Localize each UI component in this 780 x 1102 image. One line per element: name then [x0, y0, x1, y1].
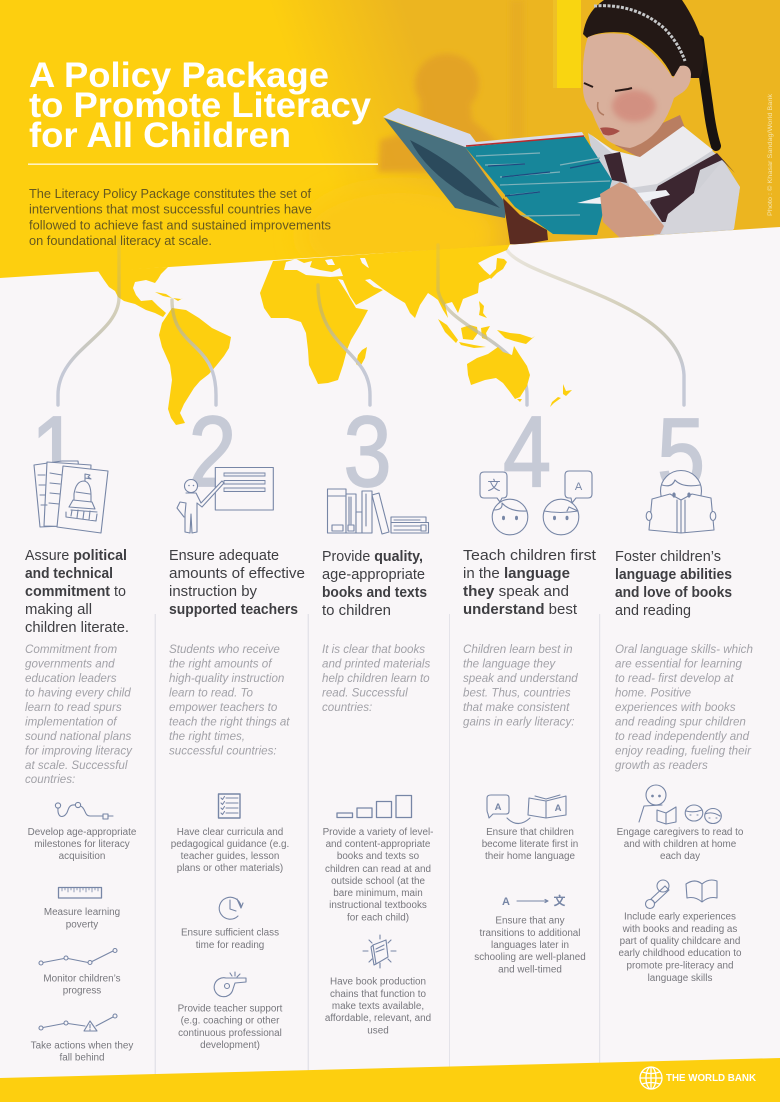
book right page — [465, 136, 612, 235]
column 4 heading: understand best — [463, 601, 578, 618]
column 3 heading — [322, 548, 427, 619]
pen — [577, 190, 670, 205]
intro text — [29, 187, 331, 248]
icon: two children with speech bubbles — [480, 471, 592, 535]
step: curricula text: pedagogical guidance (e.g. — [171, 839, 289, 850]
column 4 description: best. Thus, countries — [463, 686, 571, 700]
column 4 description: speak and understand — [463, 672, 578, 685]
column 5 description: to read- first develop at — [615, 672, 734, 685]
column 5 heading: and reading — [615, 602, 691, 619]
step: action text — [31, 1040, 133, 1064]
column 2 description: the right times, — [169, 730, 245, 743]
step: milestones text: Develop age-appropriate — [28, 827, 137, 838]
column 2 description: high-quality instruction — [169, 672, 284, 685]
column 1 description: implementation of — [25, 716, 118, 728]
column 2 description: successful countries: — [169, 744, 277, 758]
column 5 description — [615, 643, 753, 772]
Caribbean islands — [155, 292, 183, 301]
step: variety text: children can read at and — [325, 864, 431, 875]
step: milestones text: milestones for literacy — [34, 839, 130, 850]
face — [583, 33, 691, 148]
icon: book with rays — [363, 935, 396, 968]
column 1 description: Commitment from — [25, 643, 117, 656]
column 4 description: gains in early literacy: — [463, 716, 574, 728]
connector lines from map to steps — [58, 240, 684, 405]
column 2 heading: Ensure adequate — [169, 547, 279, 564]
step: measure text: poverty — [66, 920, 98, 930]
column 5 description: enjoy reading, fueling their — [615, 744, 752, 758]
column 2 heading: amounts of effective — [169, 565, 305, 582]
step: early experiences text: with books and reading as — [622, 924, 737, 935]
step: early experiences text: early childhood education to — [619, 948, 742, 959]
step numbers — [31, 396, 705, 509]
South America — [159, 308, 231, 425]
intro text: The Literacy Policy Package constitutes the set of — [29, 187, 312, 201]
column 1 description: learn to read spurs — [25, 701, 122, 714]
column 4 heading — [463, 547, 597, 618]
column 2 description: the right amounts of — [169, 658, 273, 670]
step: measure text — [44, 907, 120, 930]
title: for All Children — [29, 116, 291, 155]
column 5 description: experiences with books — [615, 701, 736, 714]
icon: whistle — [214, 972, 246, 997]
step: home language text — [482, 827, 578, 862]
Japan — [489, 258, 507, 279]
column 4 heading: in the language — [463, 565, 570, 582]
column 1 description: to having every child — [25, 686, 131, 700]
column 5 heading: and love of books — [615, 584, 732, 601]
World Bank logo — [640, 1067, 757, 1089]
icon: child reading — [646, 470, 716, 533]
column 1 description — [25, 643, 133, 786]
step: early experiences text — [619, 912, 742, 984]
step: milestones text — [28, 827, 137, 862]
title rule — [28, 163, 378, 165]
step: home language text: their home language — [485, 851, 576, 862]
step: teacher support text: continuous professional — [178, 1028, 282, 1039]
step: variety text: bare minimum, main — [333, 888, 423, 899]
blouse — [588, 125, 740, 240]
column 1 heading: and technical — [25, 565, 113, 582]
headband — [594, 6, 685, 61]
eyes, nose and mouth — [584, 83, 632, 91]
column 2 heading: instruction by — [169, 583, 257, 600]
icon: teacher at board — [177, 468, 273, 533]
column 5 description: home. Positive — [615, 686, 692, 700]
step: transitions text: Ensure that any — [495, 916, 565, 926]
step: production text: make texts available, — [332, 1001, 424, 1012]
column 1 heading: making all — [25, 601, 92, 618]
column 2 description: learn to read. To — [169, 686, 254, 700]
step numbers: 1 — [31, 396, 79, 507]
step numbers: 4 — [503, 396, 551, 507]
world map — [98, 244, 572, 425]
column 2 description: Students who receive — [169, 643, 280, 656]
column 5 description: to read independently and — [615, 730, 750, 743]
column 3 description: It is clear that books — [322, 643, 425, 656]
column 1 heading — [25, 547, 129, 636]
column 5 heading — [615, 548, 732, 619]
column 1 heading: Assure political — [25, 547, 127, 564]
title: A Policy Package — [29, 56, 329, 95]
icon: ruler — [58, 888, 102, 898]
step: production text: used — [367, 1026, 389, 1036]
Mediterranean and inland seas — [284, 258, 369, 277]
column 2 heading — [169, 547, 305, 618]
step: curricula text: teacher guides, lesson — [181, 851, 279, 862]
column 1 description: education leaders — [25, 672, 117, 685]
map: Australia — [467, 346, 531, 403]
girl reading a book — [383, 0, 740, 245]
intro text: followed to achieve fast and sustained improvements — [29, 218, 331, 232]
cheek blush — [612, 90, 656, 122]
step: monitor text: progress — [63, 986, 101, 996]
Madagascar — [356, 347, 367, 367]
column 1 description: governments and — [25, 658, 115, 670]
Borneo and Sulawesi — [461, 325, 490, 340]
New Guinea — [497, 330, 535, 344]
column 5 heading: Foster children’s — [615, 548, 721, 565]
step: variety text: instructional textbooks — [329, 900, 427, 911]
step: milestones text: acquisition — [59, 851, 105, 862]
step: early experiences text: language skills — [648, 973, 712, 984]
column 5 description: and reading spur children — [615, 716, 746, 728]
column 4 heading: Teach children first — [463, 547, 597, 564]
column 5 heading: language abilities — [615, 566, 732, 583]
column 4 heading: they speak and — [463, 583, 569, 600]
step: variety text — [323, 827, 433, 924]
column 3 description: and printed materials — [322, 658, 430, 670]
step: variety text: books and texts so — [337, 851, 420, 862]
column 1 description: sound national plans — [25, 730, 132, 743]
step: transitions text: schooling are well-planed — [474, 952, 586, 963]
Africa, Eurasia — [260, 244, 510, 384]
book pages — [383, 108, 585, 147]
step: curricula text: Have clear curricula and — [177, 827, 283, 838]
hero photo panel — [0, 0, 780, 285]
icon: books — [328, 489, 428, 534]
icon: language transition arrow — [502, 893, 566, 908]
title: to Promote Literacy — [29, 86, 372, 125]
photo background: warm lower fade — [300, 192, 500, 258]
right hand — [600, 182, 664, 238]
step: early experiences text: Include early experiences — [624, 912, 736, 922]
step: transitions text: and well-timed — [498, 964, 562, 976]
step: transitions text: languages later in — [491, 940, 569, 951]
Philippines — [479, 301, 487, 318]
column 4 description — [463, 643, 578, 728]
step: production text: affordable, relevant, and — [325, 1013, 431, 1024]
step: transitions text — [474, 916, 586, 976]
step: production text — [325, 976, 431, 1036]
step: action text: Take actions when they — [31, 1040, 133, 1052]
column 2 description: teach the right things at — [169, 716, 290, 728]
step: curricula text — [171, 827, 289, 874]
photo background: shadow of a student — [378, 54, 510, 172]
icon: caregiver reading to children — [639, 785, 721, 824]
icon: speech bubble to book — [487, 795, 566, 824]
step: action text: fall behind — [59, 1052, 105, 1064]
icon: progress line — [39, 948, 117, 965]
column 2 description — [169, 643, 290, 758]
column 2 heading: supported teachers — [169, 601, 298, 618]
step: early experiences text: promote pre-literacy and — [626, 960, 734, 972]
step: caregivers text — [617, 827, 744, 862]
Tasmania — [517, 399, 522, 402]
step: variety text: Provide a variety of level- — [323, 827, 433, 838]
column 3 description: read. Successful — [322, 686, 408, 700]
intro text: interventions that most successful countries have — [29, 202, 312, 216]
photo background: window — [557, 0, 581, 88]
step: home language text: Ensure that children — [486, 827, 574, 838]
icon: two children with speech bubbles: 文 — [487, 478, 501, 493]
step: class time text: time for reading — [196, 940, 264, 951]
photo credit: Photo : © Khasar Sandag/World Bank — [766, 93, 774, 216]
step: measure text: Measure learning — [44, 907, 120, 918]
step: teacher support text: development) — [200, 1040, 260, 1051]
column 1 heading: commitment to — [25, 583, 126, 600]
column 3 description — [322, 643, 430, 714]
icon: progress line with warning — [39, 1014, 117, 1031]
title — [29, 56, 372, 155]
step: variety text: for each child) — [347, 912, 409, 924]
step: teacher support text: (e.g. coaching or other — [181, 1016, 280, 1026]
step: transitions text: transitions to additional — [479, 928, 581, 939]
step: production text: Have book production — [330, 976, 426, 988]
step: teacher support text — [178, 1004, 283, 1051]
icon: pacifier and open book — [646, 880, 717, 908]
column 2 description: empower teachers to — [169, 701, 278, 714]
plaid straps — [604, 152, 735, 222]
sleeve — [666, 182, 740, 229]
icon: increasing book sizes — [337, 796, 412, 818]
intro text: on foundational literacy at scale. — [29, 234, 212, 248]
icon: policy documents — [34, 461, 108, 533]
neck — [615, 115, 685, 158]
icon: language transition arrow: A — [502, 896, 510, 908]
step numbers: 3 — [344, 396, 391, 507]
footer band — [0, 1058, 780, 1102]
step: variety text: and content-appropriate — [326, 839, 431, 850]
step: curricula text: plans or other materials) — [177, 863, 283, 874]
World Bank logo: THE WORLD BANK — [666, 1073, 757, 1084]
icon: speech bubble to book: A — [495, 802, 502, 813]
step: caregivers text: and with children at home — [624, 839, 737, 850]
collar — [590, 126, 713, 188]
icon: speech bubble to book: A — [555, 803, 562, 814]
column 5 description: are essential for learning — [615, 658, 743, 670]
North America — [98, 267, 168, 317]
column 3 heading: to children — [322, 602, 391, 619]
column 3 heading: Provide quality, — [322, 548, 423, 565]
column 4 description: Children learn best in — [463, 643, 573, 656]
hair — [583, 0, 704, 78]
icon: two children with speech bubbles: A — [575, 481, 583, 493]
step: caregivers text: each day — [660, 851, 700, 862]
step numbers: 5 — [657, 398, 705, 509]
New Zealand — [550, 384, 572, 407]
column dividers — [155, 614, 600, 1078]
icon: clock — [219, 897, 243, 919]
step: monitor text: Monitor children’s — [43, 974, 121, 984]
column 3 heading: books and texts — [322, 584, 427, 601]
step: class time text — [181, 928, 279, 951]
column 1 heading: children literate. — [25, 619, 129, 636]
step: home language text: become literate first in — [482, 839, 578, 850]
braid — [699, 40, 716, 146]
step: variety text: outside school (at the — [331, 876, 425, 887]
icon: milestones path — [55, 802, 113, 819]
column 3 description: countries: — [322, 701, 372, 714]
column 4 description: that make consistent — [463, 701, 570, 714]
book left cover — [384, 118, 506, 218]
step: teacher support text: Provide teacher support — [178, 1004, 283, 1014]
step: production text: chains that function to — [330, 989, 427, 1000]
column 4 description: the language they — [463, 658, 556, 670]
column 3 heading: age-appropriate — [322, 566, 425, 583]
icon: checklist — [218, 794, 240, 818]
left hand — [503, 198, 548, 245]
column 1 description: at scale. Successful — [25, 759, 128, 772]
column 1 description: for improving literacy — [25, 744, 133, 758]
column 1 description: countries: — [25, 773, 75, 786]
column 3 description: help children learn to — [322, 672, 430, 685]
step: caregivers text: Engage caregivers to read to — [617, 827, 744, 838]
step: class time text: Ensure sufficient class — [181, 928, 279, 938]
column 5 description: Oral language skills- which — [615, 643, 753, 656]
Sumatra and Java — [438, 319, 486, 348]
step numbers: 2 — [189, 396, 236, 507]
step: monitor text — [43, 974, 121, 996]
column 5 description: growth as readers — [615, 759, 708, 772]
step: early experiences text: part of quality childcare and — [620, 936, 740, 947]
icon: language transition arrow: 文 — [553, 893, 566, 908]
